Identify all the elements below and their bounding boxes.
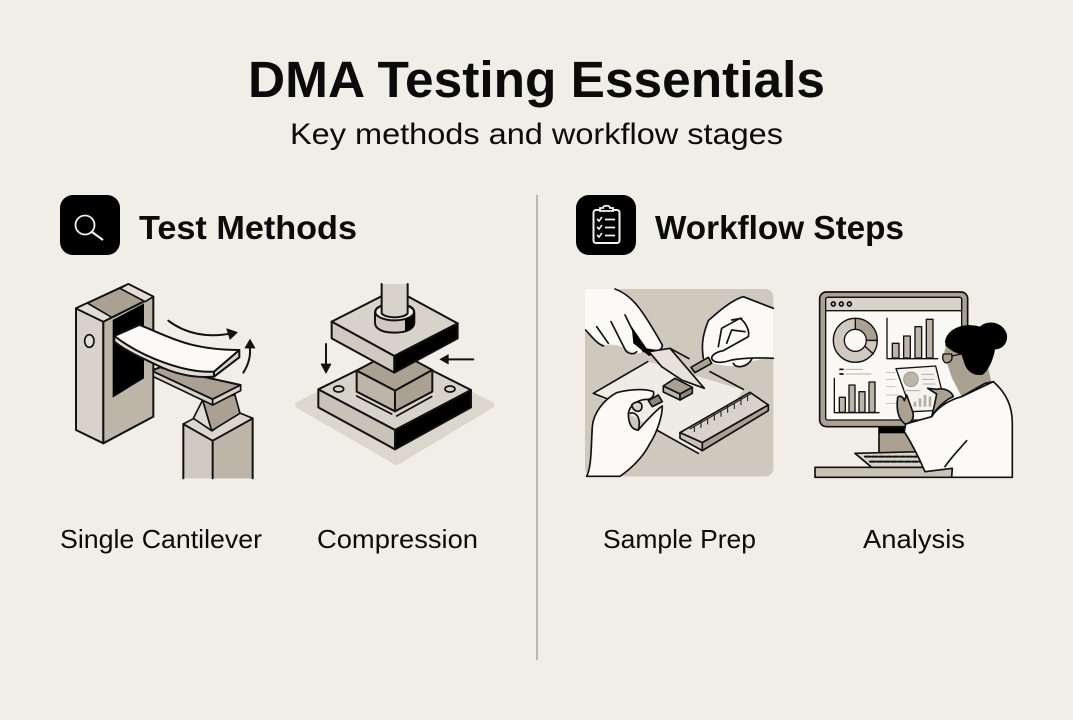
title: DMA Testing Essentials — [248, 51, 825, 108]
label: sample prep: Sample Prep — [603, 524, 756, 554]
label: compression: Compression — [317, 524, 478, 554]
illustration: single cantilever — [76, 284, 255, 478]
panel: test methods — [60, 195, 491, 554]
panel: workflow steps — [576, 195, 1012, 554]
illustration: sample prep — [585, 289, 773, 476]
illustration: compression — [298, 284, 491, 462]
label: analysis: Analysis — [863, 524, 965, 554]
heading: workflow steps: Workflow Steps — [655, 209, 904, 246]
subtitle: Key methods and workflow stages — [290, 118, 783, 151]
icon: magnifying glass — [60, 195, 120, 255]
illustration: analysis — [815, 292, 1012, 477]
label: single cantilever: Single Cantilever — [60, 524, 262, 554]
icon: clipboard checklist — [576, 195, 636, 255]
heading: test methods: Test Methods — [139, 209, 357, 246]
